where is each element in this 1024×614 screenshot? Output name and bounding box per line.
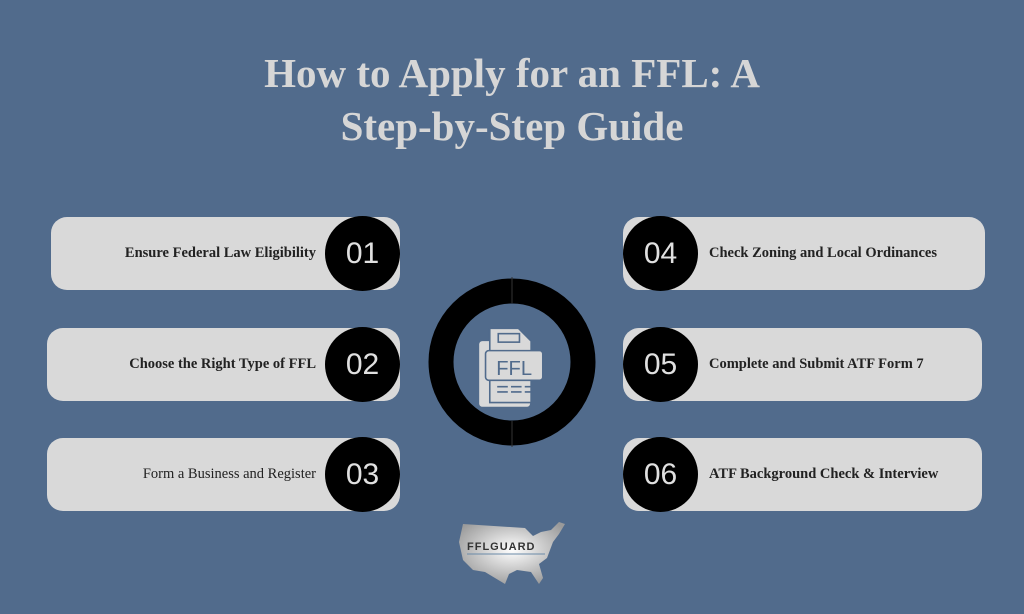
title: How to Apply for an FFL: A — [264, 50, 760, 96]
step 06: ATF Background Check & Interview — [709, 466, 938, 482]
step 02 — [47, 328, 400, 401]
step 04: 04 — [644, 237, 677, 270]
logo: FFLGuard map: FFLGUARD — [467, 541, 536, 553]
step 01: 01 — [346, 237, 379, 270]
step 03: 03 — [346, 458, 379, 491]
step 02: Choose the Right Type of FFL — [129, 356, 316, 372]
title: Step-by-Step Guide — [341, 103, 683, 149]
step 04: Check Zoning and Local Ordinances — [709, 245, 937, 261]
title — [264, 50, 760, 149]
logo: FFLGuard map — [459, 522, 565, 584]
step 02: 02 — [346, 348, 379, 381]
step 05: 05 — [644, 348, 677, 381]
icon: FFL document — [479, 328, 543, 407]
step 05 — [623, 328, 982, 401]
icon: FFL document: FFL — [496, 358, 532, 380]
step 06: 06 — [644, 458, 677, 491]
step 03 — [47, 438, 400, 511]
step 03: Form a Business and Register — [143, 466, 316, 482]
step 01 — [51, 217, 400, 290]
step 01: Ensure Federal Law Eligibility — [125, 245, 316, 261]
step 04 — [623, 217, 985, 290]
step 05: Complete and Submit ATF Form 7 — [709, 356, 924, 372]
center ring with FFL icon — [428, 277, 596, 447]
step 06 — [623, 438, 982, 511]
